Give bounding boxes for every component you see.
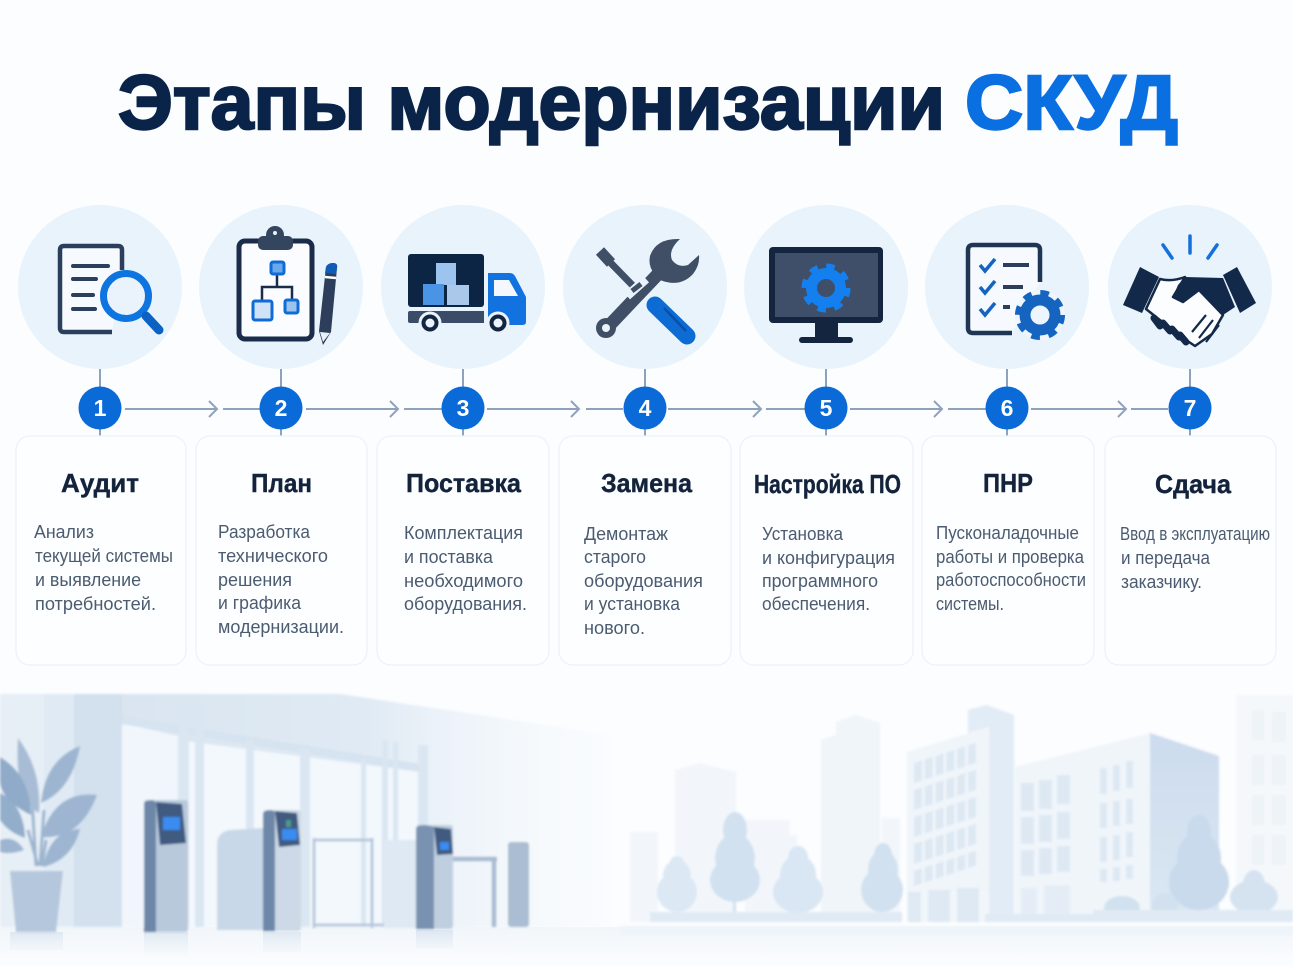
icon: delivery truck: [381, 205, 545, 369]
hedge: [650, 910, 1293, 922]
number badge 6: [986, 386, 1028, 430]
number badge 3: [442, 386, 484, 430]
card: Аудит: и выявление: [35, 570, 141, 590]
card: Сдача: заказчику.: [1121, 572, 1202, 592]
card: План: План: [251, 468, 312, 498]
illustration: city skyline: [620, 695, 1293, 935]
card: Сдача: и передача: [1121, 548, 1211, 568]
far right building windows: [1252, 710, 1286, 865]
card: План: модернизации.: [218, 617, 344, 637]
step 5: software setup: [740, 205, 913, 665]
card: Сдача: Сдача: [1155, 469, 1232, 499]
number badge 1: [78, 386, 122, 430]
distant buildings: [630, 695, 1293, 922]
turnstile 1: [144, 800, 188, 932]
timeline connectors and arrows: [100, 369, 1190, 455]
card: Поставка: Поставка: [406, 468, 522, 498]
card: Настройка ПО: обеспечения.: [762, 594, 870, 614]
card: Аудит: Аудит: [61, 468, 139, 498]
card: Настройка ПО: Установка: [762, 524, 844, 544]
card: Настройка ПО: программного: [762, 571, 878, 591]
number badge 7: 7: [1184, 395, 1196, 421]
number badge 5: 5: [820, 395, 833, 421]
card: Поставка: Комплектация: [404, 523, 523, 543]
step 6: commissioning: [922, 205, 1094, 665]
gate glass panel: [217, 828, 263, 930]
card: Аудит: потребностей.: [35, 594, 156, 614]
card: Аудит: [16, 436, 186, 665]
number badge 2: [260, 386, 302, 430]
turnstile post: [508, 842, 529, 927]
card: Замена: [559, 436, 731, 665]
potted plant: [0, 738, 97, 932]
card: Аудит: текущей системы: [35, 546, 173, 566]
tree A: [657, 856, 697, 912]
card: Замена: старого: [584, 547, 646, 567]
step 1: audit: [16, 205, 186, 665]
number badge 5: [804, 386, 848, 430]
icon: checklist with gear: [925, 205, 1089, 369]
turnstile 3: [416, 825, 497, 929]
ground strip: [620, 926, 1293, 935]
step 2: plan: [196, 205, 367, 665]
step 7: handover: [1105, 205, 1276, 665]
gate frame: [314, 838, 420, 928]
card: Замена: оборудования: [584, 571, 703, 591]
floor: [0, 927, 1293, 967]
card: Замена: нового.: [584, 618, 645, 638]
step 4: replacement: [559, 205, 731, 665]
bushes: [1104, 893, 1178, 920]
lobby building: [0, 694, 612, 927]
number badge 3: 3: [457, 395, 469, 421]
tree F: [1230, 870, 1278, 914]
card: Аудит: Анализ: [34, 522, 94, 542]
number badge 7: [1168, 386, 1212, 430]
main building with windows: [907, 705, 1014, 922]
card: Настройка ПО: и конфигурация: [762, 548, 895, 568]
icon: wrench and screwdriver: [563, 205, 727, 369]
icon: document with magnifier: [18, 205, 182, 369]
card: План: технического: [218, 546, 328, 566]
card: ПНР: Пусконаладочные: [936, 523, 1079, 543]
illustration: office lobby with turnstiles: [0, 694, 612, 932]
number badge 4: 4: [639, 395, 652, 421]
card: План: Разработка: [218, 522, 311, 542]
number badge 4: [624, 386, 666, 430]
icon: clipboard with org chart and pencil: [199, 205, 363, 369]
card: Замена: Демонтаж: [584, 524, 668, 544]
trees: [657, 812, 1278, 920]
icon: handshake: [1108, 205, 1272, 369]
card: Настройка ПО: Настройка ПО: [754, 469, 901, 499]
card: Поставка: [377, 436, 549, 665]
tree D: [861, 843, 903, 912]
card: План: решения: [218, 570, 292, 590]
card: ПНР: [922, 436, 1094, 665]
tree C: [773, 846, 823, 913]
card: Поставка: оборудования.: [404, 594, 527, 614]
card: Сдача: Ввод в эксплуатацию: [1120, 524, 1270, 544]
card: План: [196, 436, 367, 665]
card: План: и графика: [218, 593, 302, 613]
title: Этапы модернизации: [118, 60, 945, 146]
tree E: [1169, 815, 1229, 910]
card: Сдача: [1105, 436, 1276, 665]
number badge 1: 1: [94, 395, 107, 421]
title: СКУД: [965, 60, 1178, 146]
card: Замена: Замена: [601, 468, 693, 498]
card: ПНР: работоспособности: [936, 570, 1086, 590]
icon: monitor with gear: [744, 205, 908, 369]
card: ПНР: работы и проверка: [936, 547, 1085, 567]
turnstile 2: [263, 810, 301, 931]
tree B: [710, 812, 760, 913]
card: ПНР: ПНР: [983, 468, 1033, 498]
second building: [1015, 733, 1219, 922]
glass panel right: [384, 840, 416, 928]
card: Поставка: необходимого: [404, 571, 523, 591]
number badge 2: 2: [275, 395, 287, 421]
step 3: delivery: [377, 205, 549, 665]
card: Настройка ПО: [740, 436, 913, 665]
number badge 6: 6: [1001, 395, 1013, 421]
card: ПНР: системы.: [936, 594, 1004, 614]
card: Замена: и установка: [584, 594, 681, 614]
card: Поставка: и поставка: [404, 547, 494, 567]
